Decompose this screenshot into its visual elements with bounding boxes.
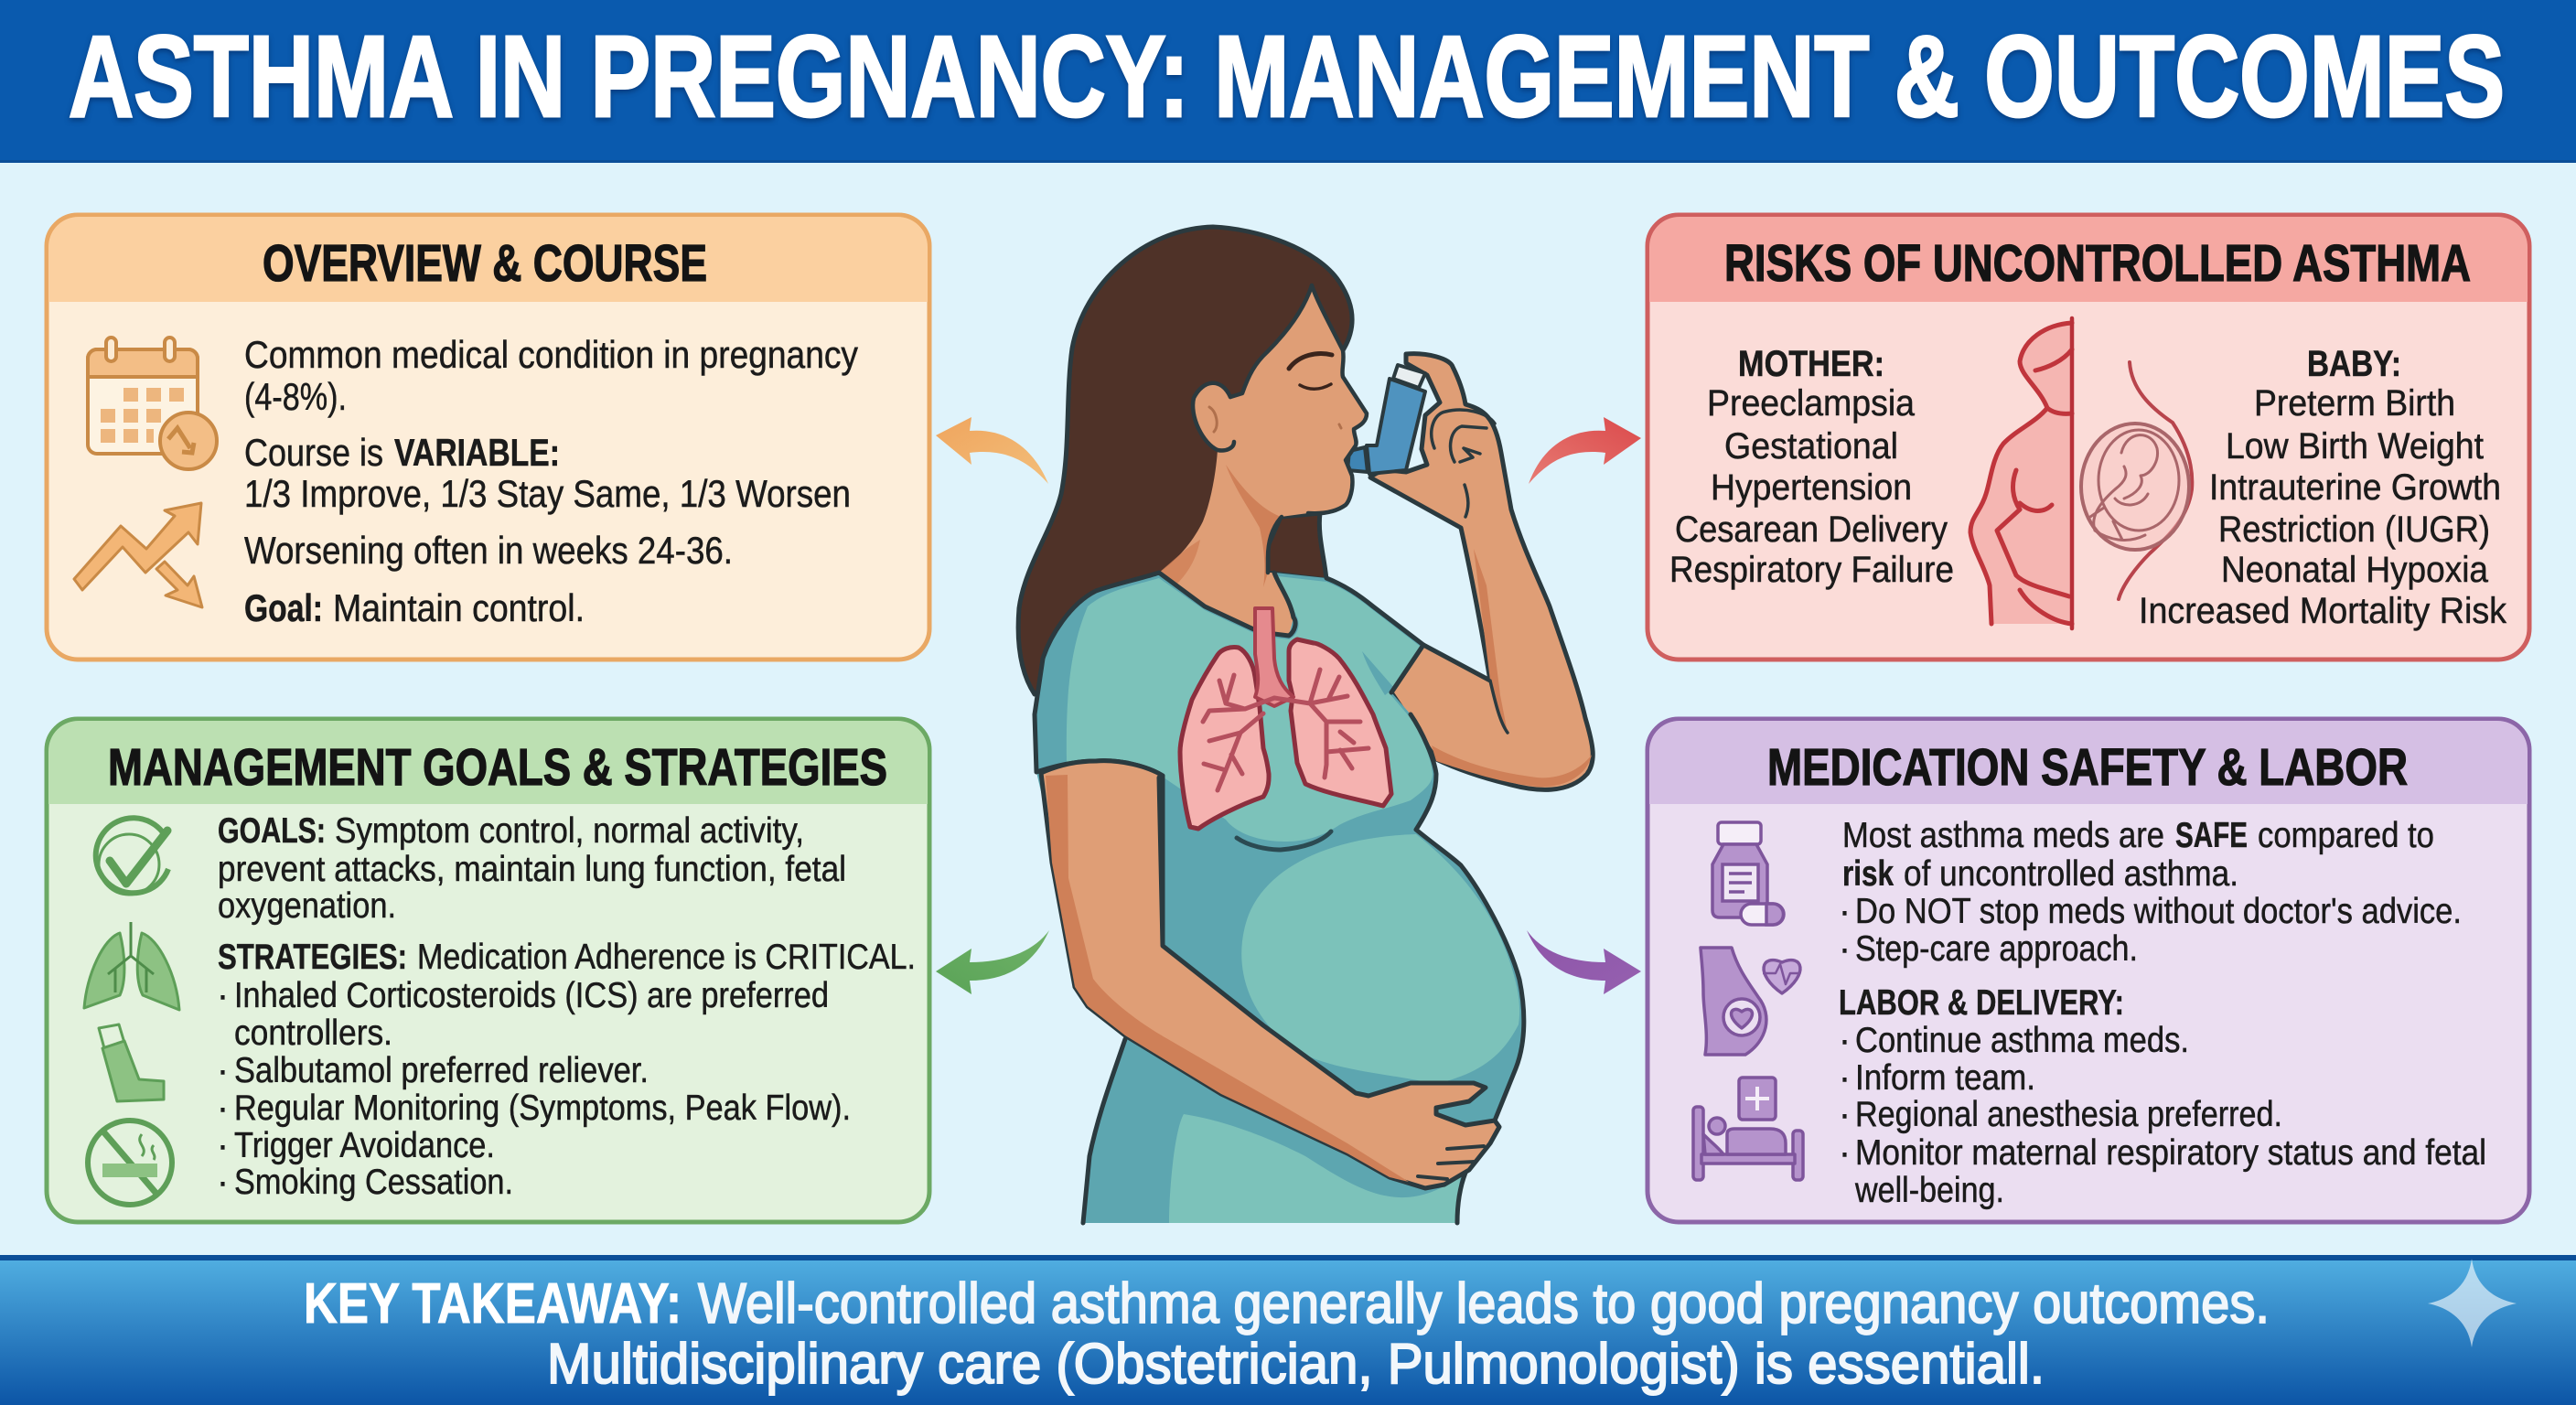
panel: overview and course — [47, 215, 929, 660]
text block: LABOR & DELIVERY: — [1839, 983, 2124, 1023]
text block: · — [217, 1051, 229, 1090]
text block: Medication Adherence is CRITICAL. — [417, 938, 916, 977]
text block: Common medical condition in pregnancy — [244, 333, 858, 376]
text block: baby risks — [2139, 344, 2507, 631]
bronchial tree — [1203, 670, 1368, 790]
lungs — [1180, 608, 1391, 829]
key takeaway text: KEY TAKEAWAY: — [304, 1272, 682, 1335]
icon: lungs — [84, 922, 179, 1010]
text block: mother risks — [1669, 344, 1954, 590]
text block: risk — [1842, 854, 1894, 894]
text block: STRATEGIES: — [218, 938, 407, 977]
icon: pregnant belly with heart — [1701, 948, 1800, 1055]
icon: medicine bottle and capsule — [1712, 822, 1784, 925]
text block: · — [217, 1163, 229, 1202]
text block: mother risks: Respiratory Failure — [1669, 550, 1954, 590]
icon: calendar — [88, 338, 217, 469]
text block: SAFE — [2175, 816, 2248, 855]
text block: VARIABLE: — [394, 431, 560, 474]
panel: risks of uncontrolled asthma — [1648, 215, 2529, 660]
illustration: fetus in uterus — [2081, 362, 2192, 599]
footer band — [0, 1255, 2576, 1405]
text block: oxygenation. — [218, 886, 396, 926]
text block: · — [1839, 892, 1851, 931]
title banner — [0, 0, 2576, 163]
text block: · — [217, 1126, 229, 1165]
key takeaway text: Well-controlled asthma generally leads to good pregnancy outcomes. — [698, 1272, 2270, 1335]
central illustration: pregnant woman using inhaler — [1018, 227, 1593, 1223]
lower arm and hand on belly — [1041, 761, 1499, 1188]
arrow: to overview — [936, 417, 1048, 484]
key takeaway text — [304, 1272, 2270, 1396]
icon: hospital bed — [1693, 1078, 1803, 1180]
text block: Inform team. — [1855, 1058, 2035, 1098]
text block: 1/3 Improve, 1/3 Stay Same, 1/3 Worsen — [244, 472, 851, 515]
text block: mother risks: Hypertension — [1711, 467, 1912, 508]
text block: baby risks: BABY: — [2307, 344, 2401, 384]
shirt body — [1035, 573, 1524, 1223]
text block: compared to — [2258, 816, 2434, 855]
raised arm and hand — [1370, 354, 1593, 789]
text block: Trigger Avoidance. — [234, 1126, 495, 1165]
text block: Worsening often in weeks 24-36. — [244, 529, 733, 572]
text block: · — [1839, 929, 1851, 969]
key takeaway text: Multidisciplinary care (Obstetrician, Pulmonologist) is essentiall. — [547, 1333, 2045, 1396]
text block: · — [217, 976, 229, 1015]
text block: of uncontrolled asthma. — [1904, 854, 2238, 894]
icon: check mark — [96, 818, 168, 895]
text block: baby risks: Restriction (IUGR) — [2218, 509, 2490, 550]
trachea — [1255, 608, 1293, 706]
text block: mother risks: Cesarean Delivery — [1675, 509, 1948, 550]
heading: MEDICATION SAFETY & LABOR — [1767, 738, 2408, 797]
hair — [1018, 227, 1352, 694]
text block: prevent attacks, maintain lung function, fetal — [218, 850, 846, 889]
text block: Most asthma meds are — [1842, 816, 2164, 855]
arrow: to medication — [1527, 930, 1641, 994]
text block: Maintain control. — [333, 586, 585, 629]
text block: baby risks: Neonatal Hypoxia — [2221, 550, 2489, 590]
heading: OVERVIEW & COURSE — [263, 234, 707, 293]
text block: · — [1839, 1133, 1851, 1173]
text block: · — [1839, 1095, 1851, 1134]
text block: mother risks: MOTHER: — [1738, 344, 1884, 384]
text block: Continue asthma meds. — [1855, 1021, 2189, 1060]
shirt highlight: upper torso — [1067, 576, 1433, 842]
text block: Regional anesthesia preferred. — [1855, 1095, 2282, 1134]
text block: · — [217, 1089, 229, 1128]
text block: Goal: — [244, 586, 323, 629]
icon: sparkle star — [2428, 1259, 2517, 1347]
text block: GOALS: — [218, 811, 326, 851]
text block: Monitor maternal respiratory status and fetal — [1855, 1133, 2486, 1173]
text block: mother risks: Preeclampsia — [1707, 383, 1916, 424]
shirt fold shadow — [1362, 651, 1394, 695]
text block: baby risks: Low Birth Weight — [2226, 426, 2484, 467]
icon: no smoking — [88, 1121, 172, 1205]
panel: medication safety and labor — [1648, 719, 2529, 1222]
text block: · — [1839, 1021, 1851, 1060]
text block: Salbutamol preferred reliever. — [234, 1051, 649, 1090]
shirt outline — [1035, 573, 1524, 1223]
text block: baby risks: Increased Mortality Risk — [2139, 591, 2507, 631]
bust line — [1237, 831, 1331, 850]
icon: inhaler — [99, 1024, 164, 1101]
illustration: half mother outline — [1970, 318, 2072, 628]
heading: MANAGEMENT GOALS & STRATEGIES — [108, 738, 887, 797]
arrow: to management — [936, 930, 1049, 994]
text block — [1839, 816, 2486, 1210]
text block: baby risks: Preterm Birth — [2254, 383, 2455, 424]
text block: Regular Monitoring (Symptoms, Peak Flow). — [234, 1089, 851, 1128]
shirt highlight: lower hem — [1169, 1114, 1461, 1223]
text block: Course is — [244, 431, 383, 474]
face and neck — [1159, 285, 1367, 636]
text block — [244, 333, 858, 629]
text block: Smoking Cessation. — [234, 1163, 513, 1202]
text block: Step-care approach. — [1855, 929, 2138, 969]
shirt highlight: belly — [1241, 834, 1519, 1084]
text block: well-being. — [1854, 1171, 2004, 1210]
text block — [217, 811, 916, 1202]
icon: up and down trend arrows — [74, 503, 202, 607]
inhaler — [1347, 365, 1425, 474]
text block: Do NOT stop meds without doctor's advice. — [1855, 892, 2462, 931]
arrow: to risks — [1529, 417, 1641, 484]
text block: mother risks: Gestational — [1724, 426, 1898, 467]
panel: management goals and strategies — [47, 719, 929, 1222]
text block: Inhaled Corticosteroids (ICS) are preferred — [234, 976, 829, 1015]
text block: · — [1839, 1058, 1851, 1098]
text block: baby risks: Intrauterine Growth — [2209, 467, 2501, 508]
text block: Symptom control, normal activity, — [335, 811, 804, 851]
text block: (4-8%). — [244, 375, 347, 418]
text block: controllers. — [234, 1014, 392, 1053]
